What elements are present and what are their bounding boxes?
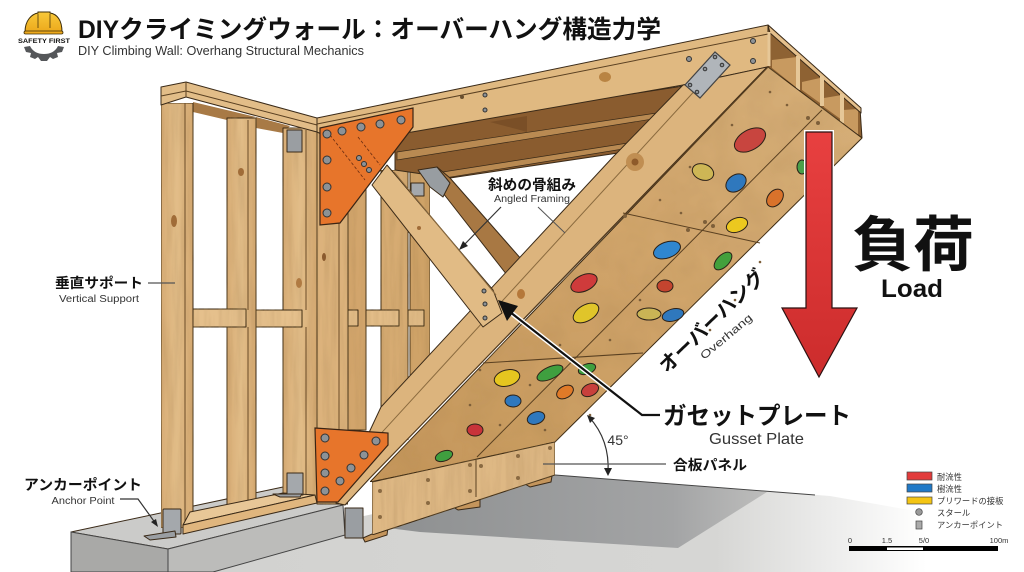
title: DIYクライミングウォール：オーバーハング構造力学 [78, 15, 661, 44]
diagonal stringer [336, 67, 767, 505]
title [78, 15, 661, 58]
label: gusset plate: ガセットプレート [663, 403, 851, 430]
legend: プリワードの接板 [937, 496, 1004, 506]
studs [161, 103, 348, 528]
kick panels and feet [363, 442, 555, 542]
stud side lines [185, 103, 339, 528]
label: anchor point [24, 477, 158, 527]
top gusset plate [320, 108, 413, 225]
top bracket [287, 130, 302, 152]
label: gusset plate: Gusset Plate [709, 431, 804, 448]
anchor brackets [144, 473, 363, 540]
label: angled framing: 斜めの骨組み [488, 177, 576, 194]
scale bar: 100m [990, 536, 1008, 545]
back stud bracket [411, 183, 424, 196]
load heading: Load [881, 275, 943, 303]
top beam [317, 25, 768, 138]
legend: 耐流性 [937, 472, 962, 482]
label: angled framing: Angled Framing [494, 194, 570, 205]
panel screws [469, 91, 820, 431]
angle marker 45 degrees [587, 415, 629, 476]
label: anchor point: アンカーポイント [24, 477, 142, 494]
floor shadow [388, 475, 767, 548]
under-beam joists [395, 85, 690, 178]
label: gusset plate [663, 403, 851, 448]
label: vertical support: Vertical Support [59, 294, 139, 305]
concrete curb [71, 487, 345, 572]
floor [213, 475, 1024, 572]
back brace strap [418, 167, 450, 197]
rafter ends [768, 25, 862, 138]
callout arrow: gusset plate [498, 300, 660, 415]
angle marker 45 degrees: 45° [607, 432, 629, 448]
label: angled framing [459, 177, 576, 250]
scale bar: 5/0 [919, 536, 929, 545]
bottom gusset plate [315, 428, 388, 502]
legend: アンカーポイント [937, 520, 1003, 530]
plywood climbing panel [370, 52, 862, 482]
label: anchor point: Anchor Point [52, 496, 115, 507]
legend [907, 472, 1004, 530]
vertical support wall [161, 82, 348, 534]
icon: safety first badge: SAFETY FIRST [18, 38, 70, 45]
bottom plate [183, 493, 315, 525]
front diagonal brace [372, 165, 502, 327]
load arrow [782, 132, 857, 377]
label: vertical support: 垂直サポート [55, 275, 143, 291]
legend: 樹流性 [937, 484, 962, 494]
label: vertical support [55, 275, 175, 305]
back studs [348, 170, 430, 440]
back diagonal brace [437, 167, 522, 275]
climbing holds [434, 123, 807, 464]
floor back edge [555, 475, 815, 495]
label: overhang: オーバーハング [654, 264, 770, 378]
knots [171, 215, 177, 227]
scale bar: 1.5 [882, 536, 892, 545]
scale bar [848, 536, 1008, 551]
label: plywood panel: 合板パネル [673, 457, 747, 473]
icon: safety first badge [18, 12, 70, 61]
title: DIY Climbing Wall: Overhang Structural Mechanics [78, 44, 364, 58]
top plate [161, 82, 317, 132]
top plate underside [193, 102, 290, 133]
strap plate [685, 52, 730, 98]
legend: スタール [937, 508, 970, 518]
label: overhang: Overhang [698, 312, 755, 362]
scale bar: 0 [848, 536, 852, 545]
load heading: 負荷 [852, 212, 974, 279]
